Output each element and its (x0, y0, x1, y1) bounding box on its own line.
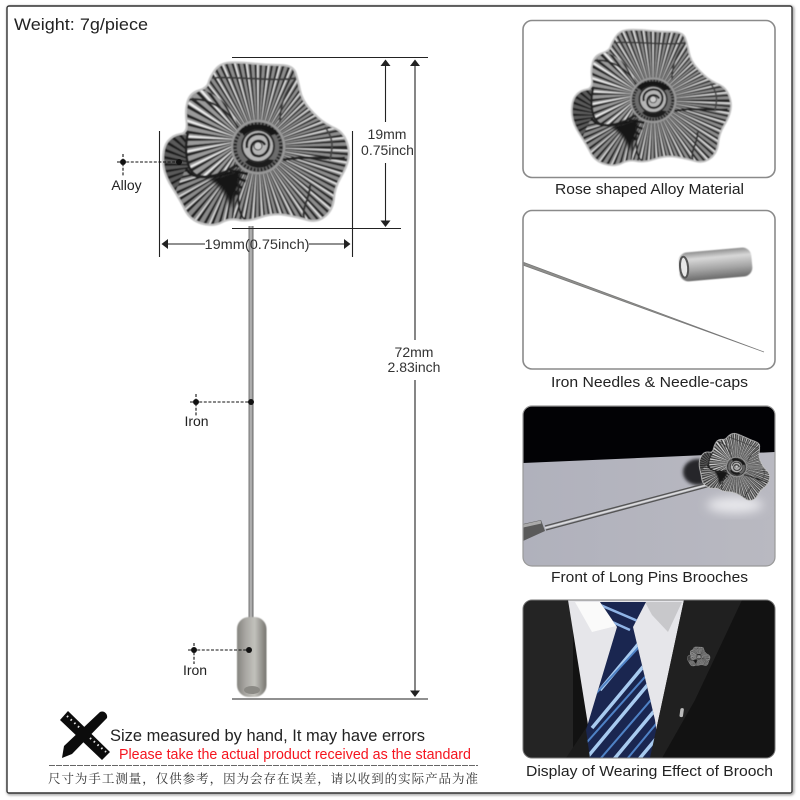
panel: rose material (523, 20, 775, 178)
needle close-up (524, 262, 764, 352)
needle (248, 226, 254, 620)
panel: front of pin photo (523, 406, 784, 566)
caption: wearing: Display of Wearing Effect of Brooch (526, 763, 773, 780)
dimension: total length 72mm: 72mm (395, 344, 433, 360)
icon: rose close-up (565, 23, 736, 174)
rose brooch head (155, 55, 355, 235)
shirt collar (575, 602, 620, 632)
dimension: total length 72mm (232, 60, 440, 699)
pin tip (679, 708, 684, 717)
panel: needle and cap (523, 210, 775, 369)
dimension: width 19mm: 19mm(0.75inch) (204, 236, 310, 252)
needle cap close-up (678, 247, 753, 282)
dimension: width 19mm (160, 131, 352, 257)
dimension: total length 72mm: 2.83inch (388, 359, 440, 375)
tie (586, 602, 656, 758)
callout: iron needle: Iron (184, 413, 209, 429)
caption: needle: Iron Needles & Needle-caps (551, 374, 748, 391)
caption: front: Front of Long Pins Brooches (551, 569, 748, 586)
needle cap (237, 617, 266, 697)
weight label: Weight: 7g/piece (14, 16, 148, 34)
callout: iron cap (183, 643, 252, 678)
note: chinese disclaimer: 尺寸为手工测量，仅供参考，因为会存在误差，请以收到的实际产品为准 (48, 771, 478, 786)
panel border: front of pin (523, 406, 775, 566)
panel: wearing photo (523, 600, 775, 770)
jacket lapel (650, 600, 742, 758)
dimension: height 19mm (232, 58, 428, 228)
dimension: height 19mm: 0.75inch (361, 142, 414, 158)
callout: alloy (111, 154, 182, 193)
dimension: height 19mm: 19mm (368, 126, 406, 142)
note: size disclaimer: Size measured by hand, It may have errors (110, 726, 425, 745)
shirt (568, 600, 684, 730)
callout: alloy: Alloy (111, 177, 142, 193)
callout: iron needle (184, 394, 254, 429)
brooch on lapel (686, 646, 711, 667)
note: red disclaimer: Please take the actual product received as the standard (119, 747, 471, 763)
caption: rose: Rose shaped Alloy Material (555, 181, 744, 198)
callout: iron cap: Iron (183, 662, 207, 678)
dashed separator (49, 764, 478, 766)
icon: rose on table (698, 432, 770, 501)
icon: crossed ruler and pen (60, 711, 110, 760)
panel border: wearing (523, 600, 775, 758)
